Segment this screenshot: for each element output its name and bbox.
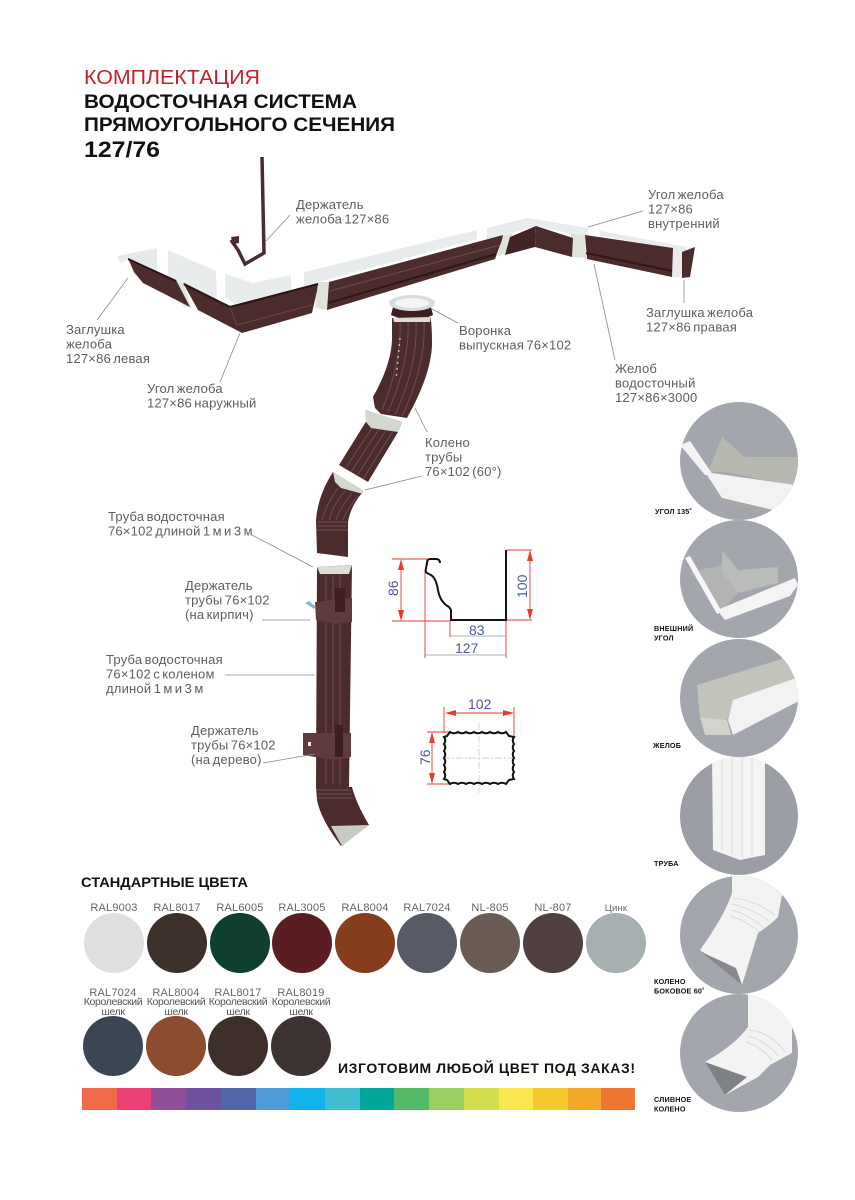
caption: side elbow: КОЛЕНО [654, 977, 686, 986]
gutter profile drawing: 83 [469, 622, 485, 638]
label: inner corner: 127×86 [648, 202, 693, 216]
rivets highlight [396, 338, 400, 380]
photo: side elbow [680, 870, 798, 994]
outer corner section [183, 283, 318, 333]
colour swatches row 2: Королевский [84, 996, 143, 1008]
left gutter section [128, 258, 190, 307]
label: pipe with elbow: длиной 1 м и 3 м [106, 681, 203, 696]
label: right cap: Заглушка желоба [646, 305, 753, 320]
pipe section drawing [417, 696, 517, 793]
label: right cap: 127×86 правая [646, 320, 737, 334]
photo: pipe [680, 750, 798, 875]
label: wood holder: Держатель [191, 723, 259, 738]
gutter holder [231, 157, 264, 264]
connector strips [173, 280, 192, 308]
caption: external corner: УГОЛ [654, 634, 674, 642]
colour swatches row 1 [84, 902, 646, 973]
photo: corner 135 [680, 402, 799, 520]
custom colour slogan: ИЗГОТОВИМ ЛЮБОЙ ЦВЕТ ПОД ЗАКАЗ! [338, 1059, 635, 1076]
label: brick holder: (на кирпич) [185, 607, 254, 622]
lower elbow [316, 472, 363, 557]
label: wood holder: трубы 76×102 [191, 738, 276, 752]
gutter assembly [117, 218, 695, 333]
label: outer corner: Угол желоба [147, 381, 223, 396]
colour swatches row 2: RAL7024 [89, 987, 137, 999]
colour swatches row 2: RAL8019 [277, 987, 325, 999]
gutter profile drawing: 127 [455, 640, 479, 656]
label: brick holder: Держатель [185, 578, 253, 593]
label: pipe with elbow: 76×102 с коленом [106, 666, 215, 682]
label: elbow: трубы [425, 450, 462, 464]
pipe holder wood [303, 733, 351, 760]
label: funnel: выпускная 76×102 [459, 338, 571, 352]
lower spout [316, 787, 369, 846]
gutter profile drawing [385, 550, 533, 658]
label: gutter holder: желоба 127×86 [296, 212, 389, 226]
upper elbow [373, 317, 432, 418]
label: gutter: водосточный [615, 376, 696, 390]
caption: gutter: ЖЕЛОБ [652, 741, 681, 750]
photo: outlet elbow [680, 990, 798, 1112]
colour swatches row 2: Королевский [209, 996, 268, 1008]
label: gutter: Желоб [615, 361, 657, 376]
pipe section drawing: 76 [417, 749, 433, 765]
colour swatches row 1: RAL8017 [153, 902, 201, 914]
long gutter [327, 235, 503, 310]
label: outer corner: 127×86 наружный [147, 396, 256, 410]
colour swatches row 1: RAL9003 [90, 902, 138, 914]
label: gutter: 127×86×3000 [615, 390, 697, 405]
caption: outlet elbow: КОЛЕНО [654, 1104, 686, 1114]
gutter profile drawing: 86 [385, 580, 401, 596]
middle pipe [339, 410, 402, 482]
downpipe [303, 565, 369, 846]
right gutter [585, 235, 673, 277]
rainbow colour bar [82, 1088, 635, 1110]
title: КОМПЛЕКТАЦИЯ [84, 67, 260, 89]
label: gutter holder: Держатель [296, 197, 364, 212]
title [84, 67, 395, 162]
colour swatches row 2: Королевский [147, 996, 206, 1008]
title: 127/76 [84, 137, 160, 162]
colour swatches row 1: Цинк [605, 903, 628, 914]
title: ПРЯМОУГОЛЬНОГО СЕЧЕНИЯ [84, 115, 395, 136]
colour swatches row 2: шелк [289, 1006, 313, 1018]
colour swatches row 2: Королевский [272, 996, 331, 1008]
left end cap and back panel [117, 248, 172, 283]
caption: pipe: ТРУБА [654, 859, 679, 868]
colour swatches row 2: шелк [101, 1006, 125, 1018]
inner corner sections [505, 226, 536, 255]
label: funnel: Воронка [459, 323, 511, 338]
colour swatches row 1: NL-807 [534, 902, 572, 914]
label: pipe with elbow: Труба водосточная [106, 652, 223, 667]
colour swatches row 2: шелк [164, 1006, 188, 1018]
colour swatches row 1: RAL3005 [278, 902, 326, 914]
colour swatches row 1: RAL8004 [341, 902, 389, 914]
caption: outlet elbow: СЛИВНОЕ [654, 1095, 691, 1104]
label: brick holder: трубы 76×102 [185, 592, 270, 608]
label: left cap: 127×86 левая [66, 351, 150, 366]
label: pipe: Труба водосточная [108, 509, 225, 524]
label: elbow: 76×102 (60°) [425, 464, 502, 479]
colour swatches row 1: RAL6005 [216, 902, 264, 914]
label: left cap: желоба [66, 336, 113, 352]
back panels [168, 250, 217, 305]
label: inner corner: Угол желоба [648, 187, 724, 202]
colour swatches row 1: NL-805 [471, 902, 509, 914]
photo: gutter [680, 639, 799, 757]
colour swatches row 2: RAL8017 [214, 987, 262, 999]
gutter profile drawing: 100 [514, 574, 530, 598]
pipe section drawing: 102 [468, 696, 492, 712]
caption: external corner: ВНЕШНИЙ [654, 624, 693, 633]
caption: corner 135: УГОЛ 135˚ [655, 507, 692, 516]
right end cap [682, 247, 695, 278]
colour swatches row 2 [83, 987, 331, 1076]
colour swatches row 2: шелк [226, 1006, 250, 1018]
funnel [389, 295, 435, 320]
colour swatches row 1: RAL7024 [403, 902, 451, 914]
photo: external corner [680, 520, 798, 638]
title: ВОДОСТОЧНАЯ СИСТЕМА [84, 92, 357, 113]
label: inner corner: внутренний [648, 216, 720, 231]
leader lines [97, 211, 684, 763]
label: elbow: Колено [425, 435, 470, 450]
colour swatches row 2: RAL8004 [152, 987, 200, 999]
standard colours heading: СТАНДАРТНЫЕ ЦВЕТА [81, 874, 248, 890]
label: pipe: 76×102 длиной 1 м и 3 м [108, 524, 253, 538]
pipe holder brick [315, 598, 352, 624]
label: left cap: Заглушка [66, 322, 125, 337]
label: wood holder: (на дерево) [191, 752, 262, 767]
caption: side elbow: БОКОВОЕ 60˚ [654, 986, 705, 996]
